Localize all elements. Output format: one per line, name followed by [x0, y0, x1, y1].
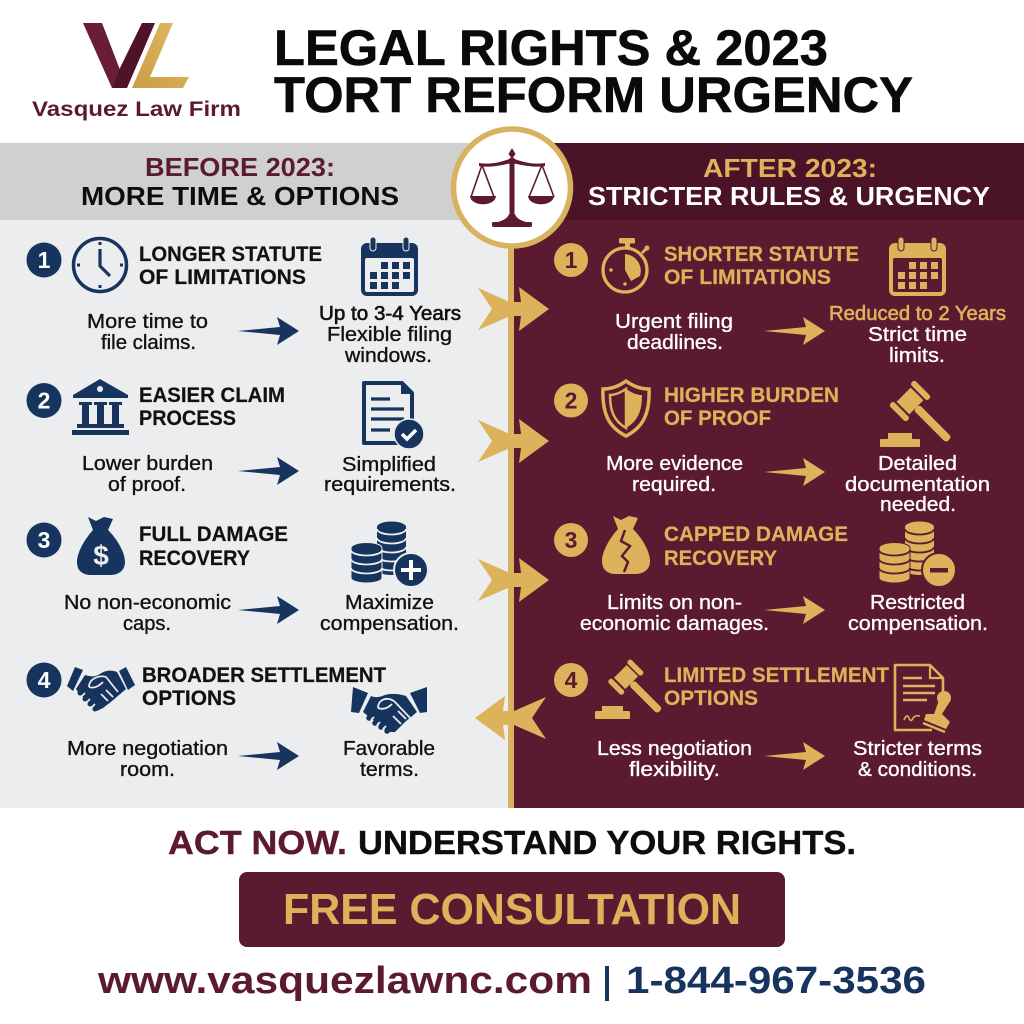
- item 3: capped damage recovery: 3: [565, 527, 577, 553]
- item 1: shorter statute of limitations: 1: [565, 247, 578, 273]
- item 4: broader settlement options: OPTIONS: [142, 687, 236, 710]
- icon: gavel: [880, 380, 962, 453]
- heading: after 2023: STRICTER RULES & URGENCY: [588, 181, 990, 211]
- icon: cracked money bag: [602, 516, 650, 574]
- item 2: higher burden of proof: [554, 380, 990, 516]
- item 2: higher burden of proof: Detailed: [878, 453, 957, 475]
- icon: courthouse: [72, 379, 129, 435]
- item 3: full damage recovery: 3: [38, 527, 50, 553]
- item 4: limited settlement options: flexibility.: [629, 759, 720, 781]
- item 4: broader settlement options: More negotiation: [67, 738, 228, 760]
- item 3: capped damage recovery: RECOVERY: [664, 547, 777, 570]
- item 1: shorter statute of limitations: Strict time: [868, 324, 967, 346]
- heading: before 2023: [81, 152, 399, 211]
- icon: coins with minus: [879, 522, 956, 587]
- arrow: transition row 1: [478, 287, 549, 331]
- title: LEGAL RIGHTS & 2023: [274, 20, 828, 76]
- item 3: capped damage recovery: economic damages.: [580, 613, 769, 635]
- item 3: full damage recovery: caps.: [123, 613, 171, 635]
- item 2: easier claim process: PROCESS: [139, 407, 236, 430]
- item 1: longer statute of limitations: LONGER STATUTE: [139, 243, 322, 266]
- badge: scales of justice: [454, 129, 570, 246]
- contact line: [97, 960, 926, 1002]
- item 3: capped damage recovery: Limits on non-: [607, 592, 742, 614]
- item 2: easier claim process: 2: [38, 388, 50, 414]
- item 2: easier claim process: EASIER CLAIM: [139, 384, 285, 407]
- item 1: shorter statute of limitations: OF LIMITATIONS: [664, 266, 831, 289]
- item 4: limited settlement options: Less negotiation: [597, 738, 752, 760]
- icon: coins with plus: [351, 522, 428, 587]
- icon: shield: [603, 381, 649, 436]
- heading: after 2023: [588, 153, 990, 211]
- item 1: shorter statute of limitations: SHORTER STATUTE: [664, 243, 859, 266]
- icon: stopwatch: [603, 238, 650, 292]
- item 3: full damage recovery: RECOVERY: [139, 547, 250, 570]
- heading: before 2023: BEFORE 2023:: [145, 152, 335, 182]
- item 3: capped damage recovery: Restricted: [870, 592, 965, 614]
- item 2: higher burden of proof: required.: [632, 474, 716, 496]
- item 4: broader settlement options: BROADER SETTLEMENT: [142, 664, 386, 687]
- item 3: full damage recovery: Maximize: [345, 592, 434, 614]
- logo: Vasquez Law Firm: [32, 23, 241, 121]
- item 1: shorter statute of limitations: [554, 237, 1006, 367]
- icon: calendar: [889, 237, 946, 296]
- item 1: shorter statute of limitations: Reduced to 2 Years: [829, 303, 1006, 325]
- arrow: [764, 458, 825, 486]
- item 2: easier claim process: [26, 379, 456, 496]
- icon: handshake: [67, 667, 135, 711]
- title: TORT REFORM URGENCY: [274, 67, 913, 123]
- call to action headline: UNDERSTAND YOUR RIGHTS.: [358, 824, 856, 861]
- item 2: higher burden of proof: HIGHER BURDEN: [664, 384, 839, 407]
- arrow: transition row 3: [478, 558, 549, 602]
- icon: calendar: [361, 237, 418, 296]
- item 1: shorter statute of limitations: Urgent filing: [615, 311, 733, 333]
- item 2: easier claim process: Simplified: [342, 454, 436, 476]
- item 4: limited settlement options: OPTIONS: [664, 687, 758, 710]
- arrow: transition row 4: [475, 696, 546, 740]
- item 1: longer statute of limitations: [26, 237, 461, 367]
- icon: scales: [470, 148, 554, 227]
- icon: clock: [74, 238, 126, 292]
- item 4: broader settlement options: Favorable: [343, 738, 435, 760]
- icon: document with stamp: [895, 665, 951, 732]
- item 4: limited settlement options: & conditions.: [858, 759, 977, 781]
- item 4: broader settlement options: terms.: [360, 759, 419, 781]
- icon: money bag: $: [93, 540, 109, 571]
- item 2: easier claim process: Lower burden: [82, 453, 213, 475]
- arrow: [764, 596, 825, 624]
- item 2: higher burden of proof: documentation: [845, 474, 990, 496]
- item 4: broader settlement options: room.: [120, 759, 175, 781]
- item 4: limited settlement options: [554, 659, 982, 781]
- item 4: limited settlement options: LIMITED SETTLEMENT: [664, 664, 889, 687]
- button: free consultation: [239, 872, 785, 947]
- item 1: longer statute of limitations: More time to: [87, 311, 208, 333]
- item 4: broader settlement options: [26, 662, 435, 781]
- item 2: easier claim process: of proof.: [108, 474, 186, 496]
- panel: before 2023: [0, 143, 512, 808]
- item 3: capped damage recovery: CAPPED DAMAGE: [664, 523, 848, 546]
- item 1: shorter statute of limitations: deadlines.: [627, 332, 723, 354]
- item 3: capped damage recovery: [554, 516, 988, 635]
- heading: after 2023: AFTER 2023:: [703, 153, 877, 183]
- call to action headline: ACT NOW.: [168, 824, 347, 861]
- center divider line: [508, 240, 514, 808]
- contact line: www.vasquezlawnc.com: [97, 960, 592, 1002]
- item 2: easier claim process: requirements.: [324, 474, 456, 496]
- item 1: shorter statute of limitations: limits.: [889, 345, 945, 367]
- arrow: [238, 596, 299, 624]
- call to action headline: [168, 824, 856, 861]
- item 1: longer statute of limitations: windows.: [344, 345, 432, 367]
- item 2: higher burden of proof: More evidence: [606, 453, 743, 475]
- arrow: transition row 2: [478, 419, 549, 463]
- contact line: 1-844-967-3536: [626, 960, 926, 1002]
- item 3: full damage recovery: [26, 517, 459, 635]
- item 2: higher burden of proof: OF PROOF: [664, 407, 771, 430]
- item 3: full damage recovery: FULL DAMAGE: [139, 523, 288, 546]
- title: [274, 20, 913, 123]
- item 1: longer statute of limitations: file claims.: [101, 332, 196, 354]
- item 4: limited settlement options: 4: [565, 667, 578, 693]
- arrow: [764, 317, 825, 345]
- item 2: higher burden of proof: 2: [565, 388, 577, 414]
- arrow: [238, 742, 299, 770]
- heading: before 2023: MORE TIME & OPTIONS: [81, 181, 399, 211]
- item 3: full damage recovery: No non-economic: [64, 592, 231, 614]
- item 3: capped damage recovery: compensation.: [848, 613, 988, 635]
- arrow: [238, 457, 299, 485]
- item 1: longer statute of limitations: OF LIMITATIONS: [139, 266, 306, 289]
- item 4: limited settlement options: Stricter terms: [853, 738, 982, 760]
- logo: Vasquez Law Firm: Vasquez Law Firm: [32, 98, 241, 121]
- icon: money bag: [77, 517, 125, 575]
- item 2: higher burden of proof: needed.: [880, 494, 956, 516]
- arrow: [764, 742, 825, 770]
- icon: document with check: [364, 382, 424, 449]
- arrow: [238, 317, 299, 345]
- item 1: longer statute of limitations: Flexible filing: [327, 324, 452, 346]
- item 1: longer statute of limitations: Up to 3-4 Years: [319, 303, 461, 325]
- panel: after 2023: [512, 143, 1024, 808]
- button: free consultation: FREE CONSULTATION: [283, 885, 741, 934]
- icon: gavel: [595, 659, 671, 723]
- icon: handshake with cuffs: [351, 687, 427, 732]
- item 3: full damage recovery: compensation.: [320, 613, 459, 635]
- item 4: broader settlement options: 4: [38, 667, 51, 693]
- item 1: longer statute of limitations: 1: [38, 247, 51, 273]
